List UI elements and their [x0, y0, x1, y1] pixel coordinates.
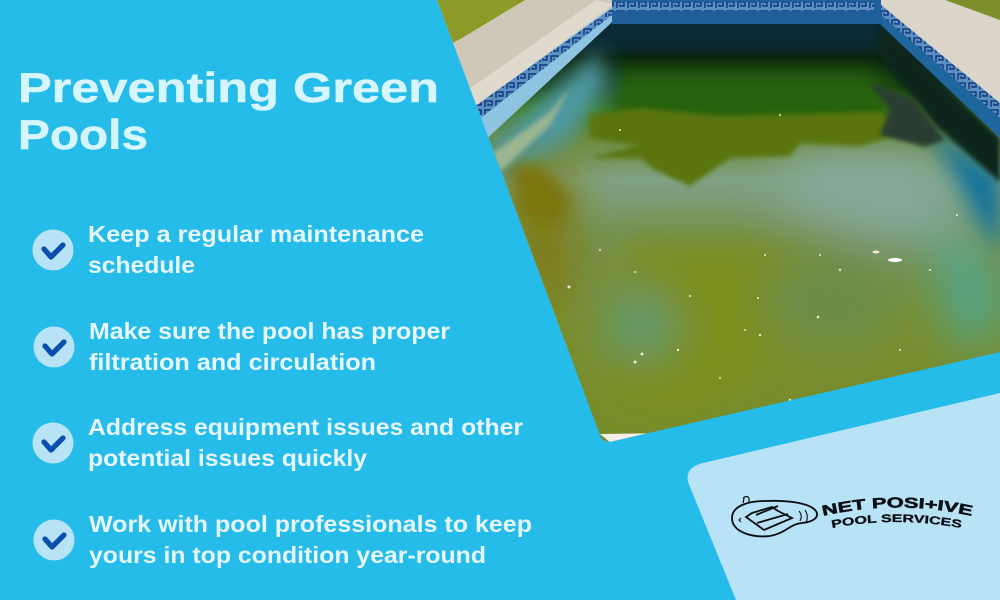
item 1 text: [88, 221, 424, 278]
tile band left: [474, 7, 614, 120]
grass top right: [945, 0, 1000, 20]
item 4 text: yours in top condition year-round: [89, 542, 486, 568]
grass top left: [437, 0, 525, 42]
checklist item 4: [34, 511, 532, 568]
check icon 4: [34, 520, 74, 560]
item 2 text: Make sure the pool has proper: [89, 318, 450, 344]
logo card: [688, 393, 1000, 600]
tile band back: [612, 2, 874, 11]
wall shadow right: [875, 25, 1000, 182]
deck right: [878, 0, 1000, 106]
logo: POOL SERVICES: [832, 514, 962, 528]
item 4 text: [89, 511, 532, 568]
item 3 text: [88, 414, 523, 471]
pool photo: [437, 0, 1000, 452]
deck left: [452, 0, 615, 108]
logo: [731, 496, 973, 538]
pool wall left: [474, 7, 612, 144]
logo pool icon: [732, 496, 817, 536]
title: Preventing Green: [18, 64, 439, 111]
logo wordmark top: [823, 508, 972, 516]
item 3 text: Address equipment issues and other: [88, 414, 523, 440]
item 4 text: Work with pool professionals to keep: [89, 511, 532, 537]
reflection dark right: [870, 82, 945, 147]
check icon 2: [34, 326, 74, 368]
checklist item 1: [32, 221, 424, 278]
check icon 3: [32, 422, 74, 464]
pool wall back: [612, 0, 881, 24]
checklist item 3: [32, 414, 523, 471]
title: [18, 64, 439, 158]
item 3 text: potential issues quickly: [88, 445, 367, 471]
item 1 text: Keep a regular maintenance: [88, 221, 424, 247]
pool wall right: [881, 5, 1000, 138]
item 1 text: schedule: [88, 252, 195, 278]
water: [470, 22, 1000, 452]
tile band right: [881, 5, 1000, 118]
logo wordmark bottom: [832, 522, 961, 528]
corner of white deck: [600, 433, 648, 442]
item 2 text: [89, 318, 450, 375]
water reflections: [490, 88, 905, 225]
logo: NET POSI+IVE: [822, 497, 973, 516]
item 2 text: filtration and circulation: [89, 349, 376, 375]
title: Pools: [18, 111, 148, 158]
checklist item 2: [34, 318, 450, 375]
debris specks: [568, 114, 958, 401]
check icon 1: [32, 230, 74, 270]
